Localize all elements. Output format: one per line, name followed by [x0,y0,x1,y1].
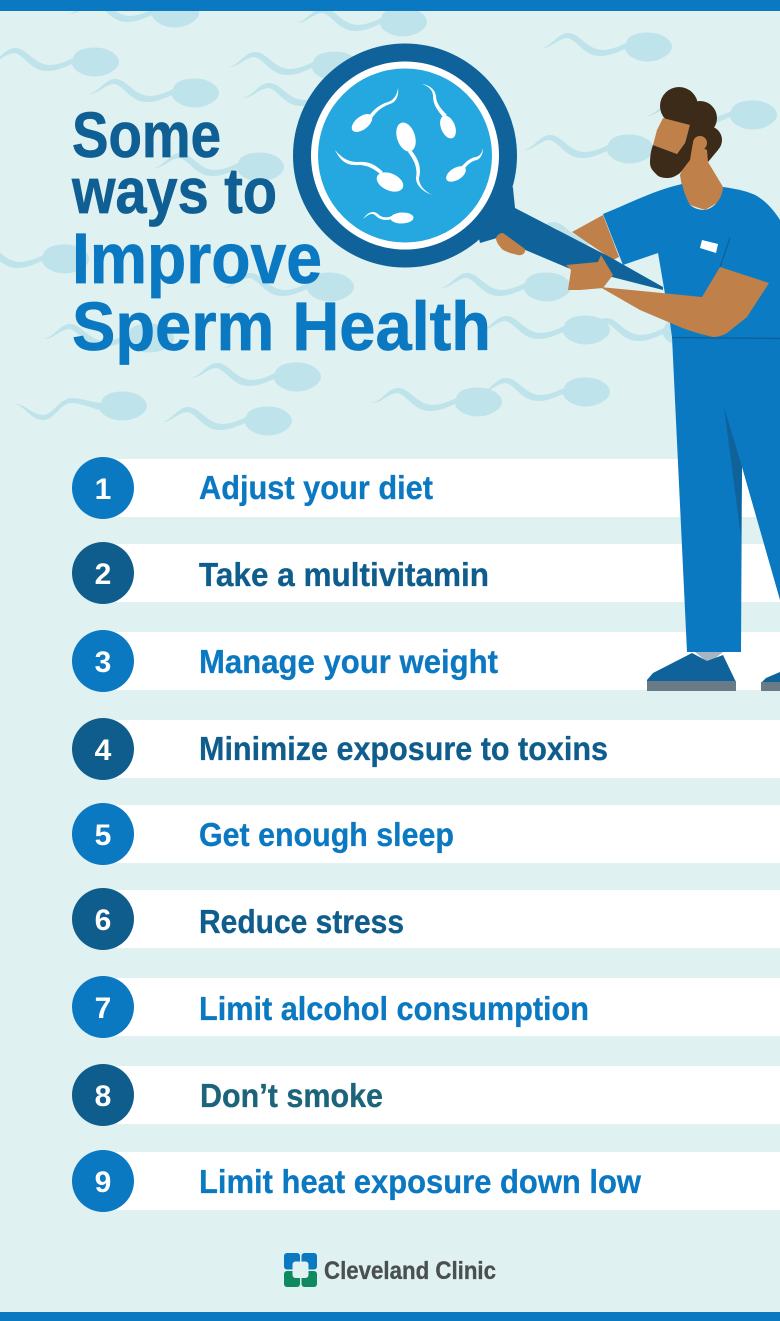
item 7: Limit alcohol consumption [199,990,589,1027]
background sperm pattern [0,0,777,436]
item 3 [72,630,498,692]
list row backgrounds [103,459,780,1210]
item 6 [72,888,404,950]
shoes [647,652,780,691]
item 4: 4 [95,734,112,767]
illustration: man in scrubs [572,87,780,652]
title: Sperm Health [72,288,491,365]
item 9 [72,1150,641,1212]
item 3: 3 [95,646,111,679]
item 3: Manage your weight [199,643,498,680]
item 8: 8 [95,1080,111,1113]
item 4 [72,718,608,780]
item 9: Limit heat exposure down low [199,1163,641,1200]
ear [693,136,707,150]
title: Improve [72,220,322,299]
item 4: Minimize exposure to toxins [199,730,608,767]
item 2: Take a multivitamin [199,556,489,593]
item 1: 1 [95,473,111,506]
hair [660,87,722,162]
shirt [603,184,780,337]
handle [470,170,663,290]
title: Some [72,99,221,171]
item 2: 2 [95,558,111,591]
item 5: Get enough sleep [199,816,454,853]
sperm under lens [335,84,483,224]
title [71,99,491,365]
magnifying glass [293,44,663,290]
item 6: 6 [95,904,111,937]
item 1 [72,457,433,519]
item 1: Adjust your diet [199,469,433,506]
illustration: hands and front arm [496,233,769,337]
beard [650,125,695,178]
Cleveland Clinic logo: Cleveland Clinic [324,1257,496,1285]
front arm [600,267,769,337]
item 5 [72,803,454,865]
left hand [496,233,525,255]
right hand [566,255,613,290]
pants [672,337,780,652]
title: ways to [71,155,277,227]
item 8: Don’t smoke [200,1077,383,1114]
bottom bar [0,1312,780,1321]
top bar [0,0,780,11]
face [653,118,690,154]
Cleveland Clinic logo [284,1253,496,1287]
lens frame [293,44,517,268]
item 8 [72,1064,383,1126]
item 9: 9 [95,1166,111,1199]
item 7: 7 [95,992,111,1025]
item 6: Reduce stress [199,903,404,940]
back arm [572,215,619,260]
item 5: 5 [95,819,111,852]
neck [680,143,723,210]
item 7 [72,976,589,1038]
item 2 [72,542,489,604]
badge [700,240,718,253]
